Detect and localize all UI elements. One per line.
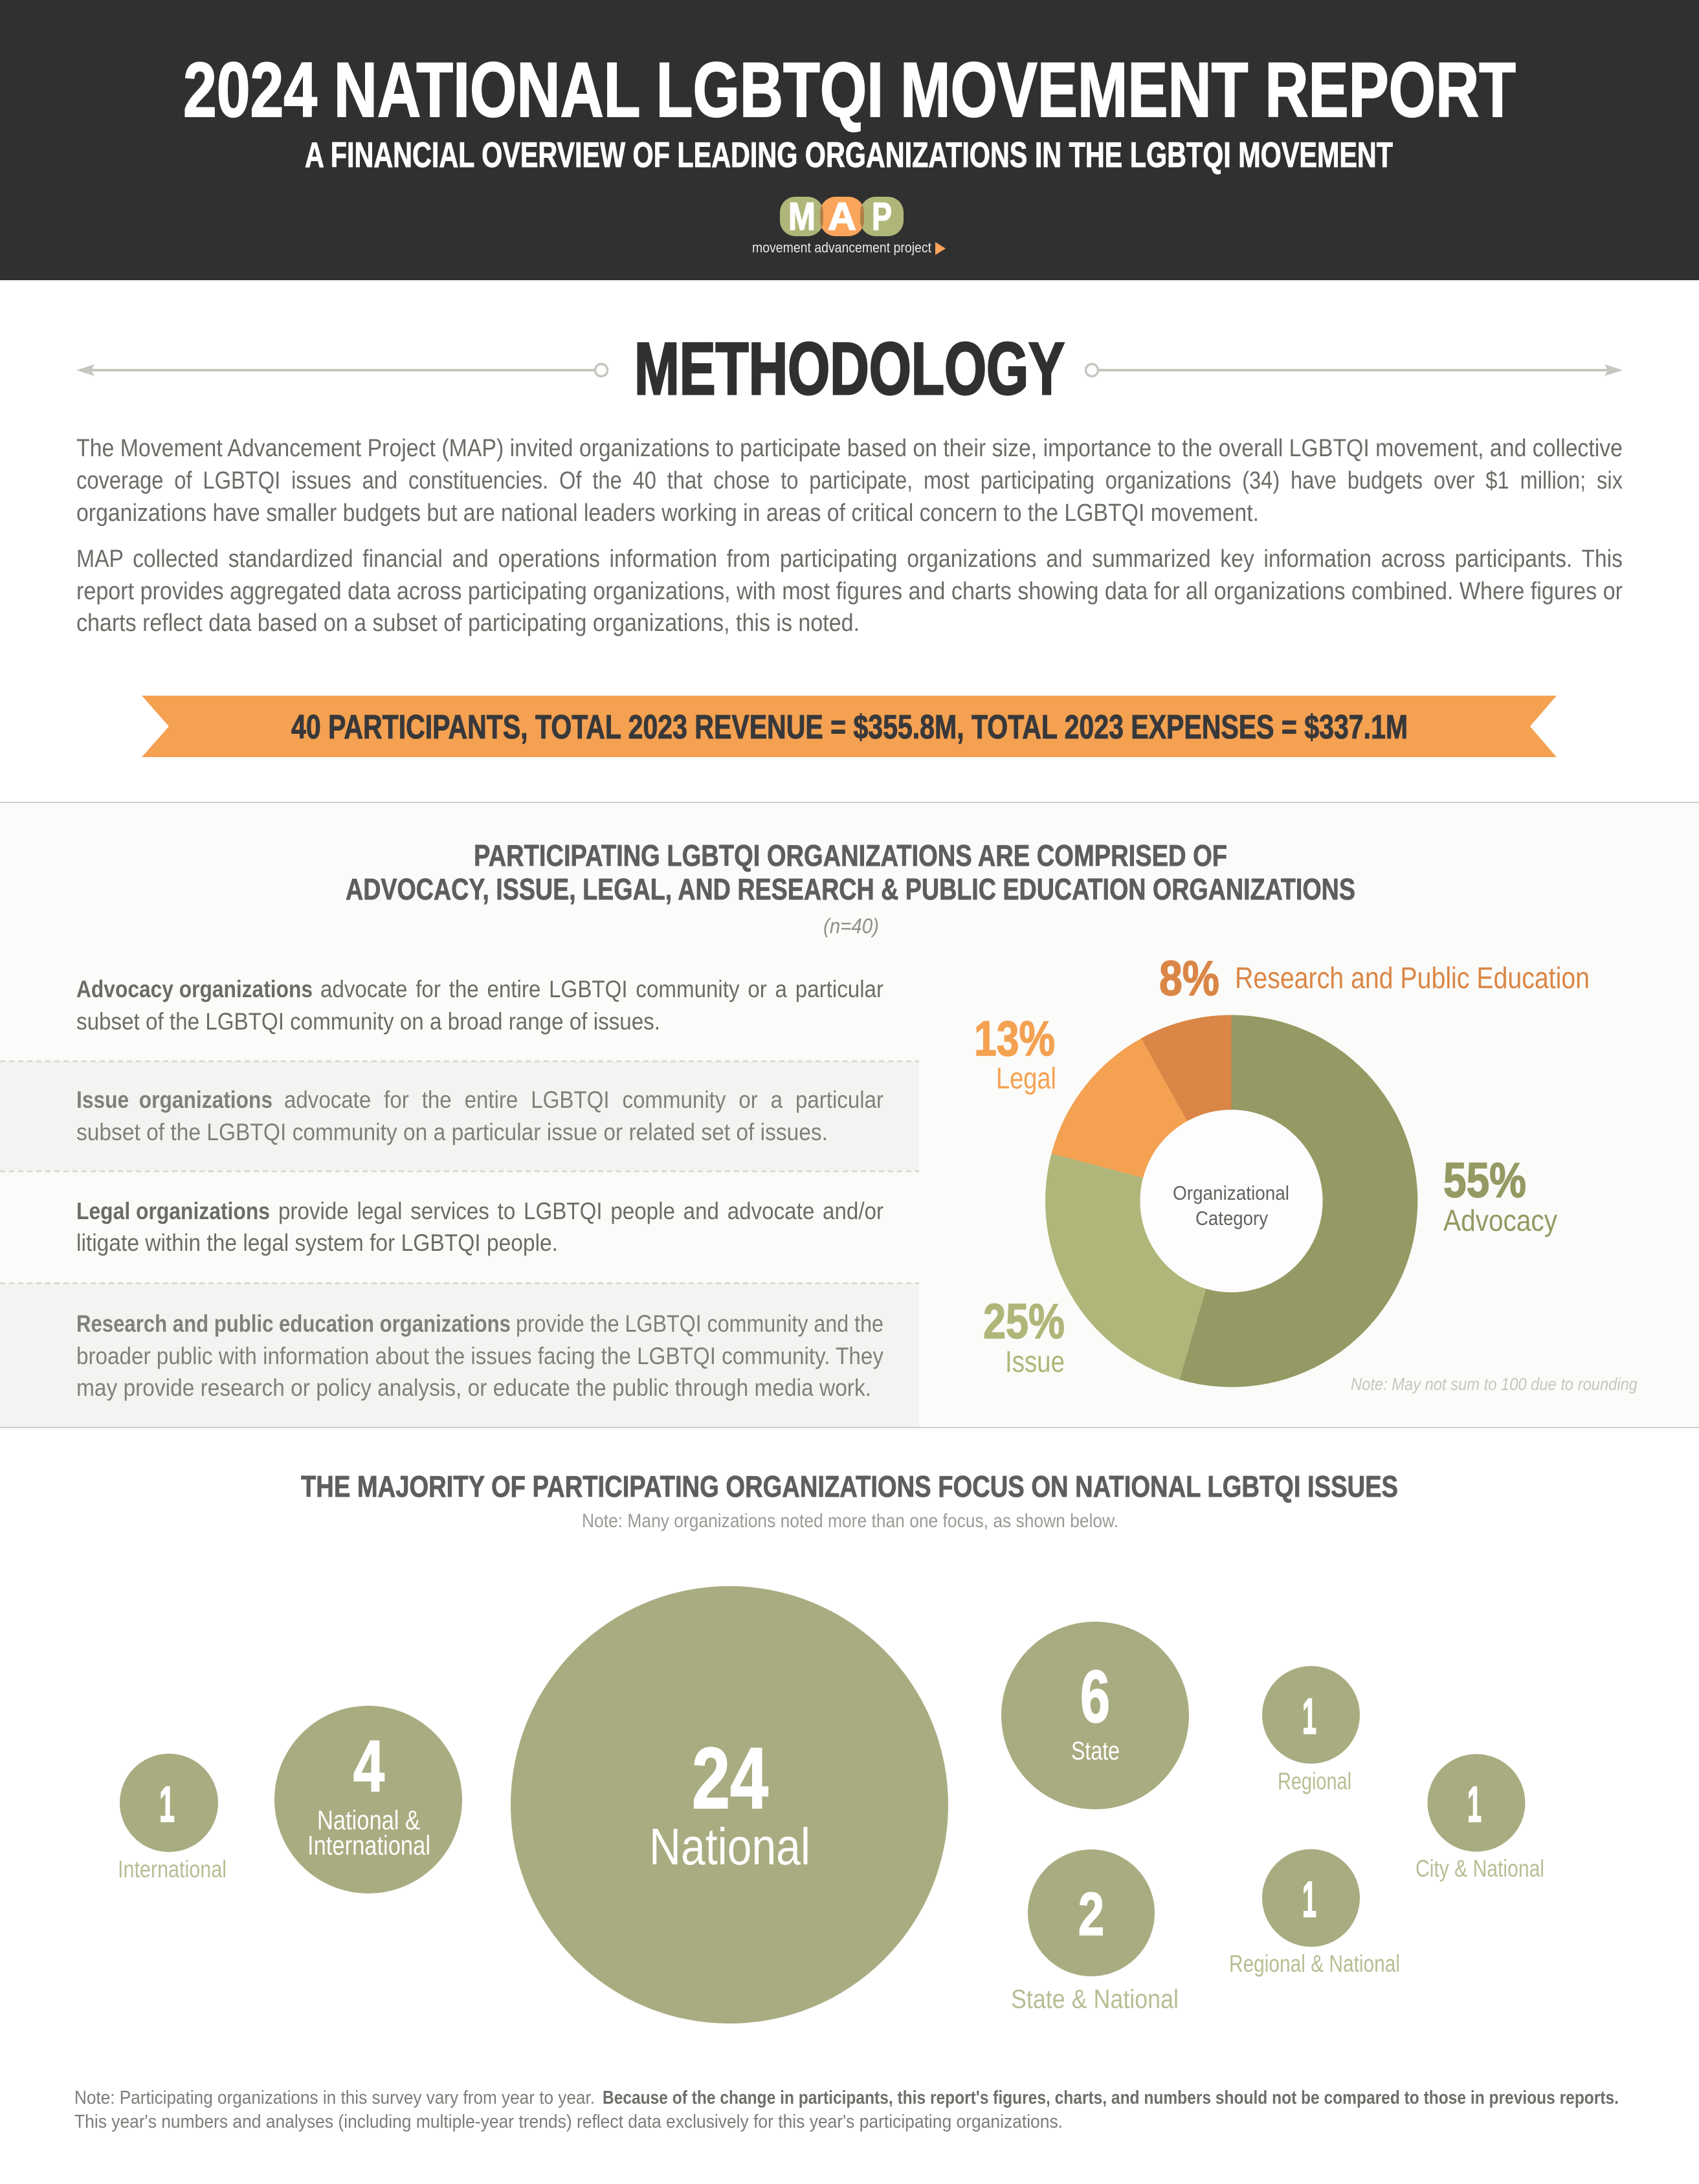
bubble: international 1: 1 [159, 1776, 175, 1833]
text block: paragraph two [76, 546, 1623, 637]
bubble: regional 1 [1262, 1666, 1360, 1794]
donut center label [1173, 1182, 1289, 1230]
bubble: state and national 2: 2 [1078, 1880, 1104, 1948]
text block: paragraph two: charts reflect data based on a subset of participating organizations, this is noted. [76, 610, 860, 637]
label: advocacy 55%: 55% [1443, 1153, 1526, 1208]
donut center label: Category [1195, 1207, 1268, 1230]
label: research 8% [1159, 951, 1590, 1006]
rounding note: Note: May not sum to 100 due to rounding [1351, 1374, 1638, 1394]
bubble: state 6 [1001, 1622, 1189, 1809]
banner: totals: 40 PARTICIPANTS, TOTAL 2023 REVENUE = $355.8M, TOTAL 2023 EXPENSES = $337.1M [291, 709, 1408, 746]
heading: focus: THE MAJORITY OF PARTICIPATING ORGANIZATIONS FOCUS ON NATIONAL LGBTQI ISSUES [301, 1470, 1398, 1503]
panel: methodology [76, 328, 1623, 757]
bubble: international 1 [118, 1754, 227, 1882]
heading: categories [346, 839, 1355, 906]
bubble: national 24: National [649, 1818, 810, 1875]
bubble: city and national 1 [1416, 1754, 1544, 1882]
bubble: state 6: State [1071, 1737, 1120, 1765]
text block: legal organizations [76, 1198, 883, 1256]
label: issue 25% [983, 1294, 1065, 1378]
sample size note: (n=40) [823, 914, 879, 938]
text block: research and public education organizations: may provide research or policy analysis, or educate the public through media work. [76, 1374, 871, 1401]
label: advocacy 55% [1443, 1153, 1557, 1237]
logo: MAP: M [788, 195, 816, 238]
bubble: city and national 1: 1 [1467, 1776, 1482, 1833]
text block: advocacy organizations: subset of the LGBTQI community on a broad range of issues. [76, 1008, 660, 1035]
footnote: This year's numbers and analyses (including multiple-year trends) reflect data exclusively for this year's participating organizations. [74, 2112, 1063, 2132]
label: issue 25%: Issue [1005, 1345, 1065, 1378]
bubble: state and national 2: State & National [1011, 1984, 1179, 2014]
text block: research and public education organizations: broader public with information about the issues facing the LGBTQI community. They [76, 1343, 883, 1369]
label: research 8%: Research and Public Education [1235, 961, 1590, 995]
logo: MAP [752, 195, 946, 256]
label: legal 13%: 13% [974, 1011, 1055, 1066]
text block: research and public education organizations: provide the LGBTQI community and the [516, 1310, 883, 1337]
label: research 8%: 8% [1159, 951, 1219, 1006]
bubble: state 6: 6 [1080, 1656, 1110, 1738]
focus note: Note: Many organizations noted more than one focus, as shown below. [582, 1510, 1118, 1532]
footnote [74, 2088, 1619, 2132]
text block: advocacy organizations: advocate for the entire LGBTQI community or a particular [320, 976, 883, 1002]
donut slice: research 8% [1141, 1015, 1231, 1121]
donut slice: issue 25% [1045, 1154, 1206, 1380]
logo: MAP: movement advancement project [752, 239, 931, 256]
text block: legal organizations: Legal organizations [76, 1198, 270, 1224]
bubble: national 24 [511, 1586, 948, 2024]
text block: research and public education organizations: Research and public education organizations [76, 1310, 511, 1337]
text block: paragraph one: organizations have smaller budgets but are national leaders working in areas of critical concern to the LGBTQI movement. [76, 500, 1259, 527]
label: advocacy 55%: Advocacy [1443, 1204, 1557, 1237]
footnote: Note: Participating organizations in this survey vary from year to year. [74, 2088, 595, 2108]
text block: issue organizations: Issue organizations [76, 1086, 272, 1113]
bubble: regional and national 1: 1 [1302, 1871, 1316, 1928]
bubble: national and international 4: International [307, 1830, 430, 1860]
bubble: national and international 4 [274, 1706, 462, 1893]
donut center [1140, 1110, 1323, 1292]
bubble: regional 1: 1 [1302, 1688, 1316, 1745]
donut center label: Organizational [1173, 1182, 1289, 1204]
panel: header [0, 0, 1699, 280]
text block: legal organizations: provide legal services to LGBTQI people and advocate and/or [278, 1198, 883, 1224]
heading: categories: ADVOCACY, ISSUE, LEGAL, AND RESEARCH & PUBLIC EDUCATION ORGANIZATIONS [346, 872, 1355, 906]
donut slice: legal 13% [1051, 1039, 1187, 1178]
banner: totals [142, 696, 1557, 757]
bubble: national and international 4: National & [317, 1805, 420, 1835]
donut chart: organizational category [1045, 1015, 1417, 1387]
bubble: national and international 4: 4 [353, 1726, 384, 1807]
label: legal 13% [974, 1011, 1056, 1095]
bubble: state and national 2 [1011, 1849, 1179, 2014]
bubble: international 1: International [118, 1856, 227, 1882]
bubble: regional and national 1 [1229, 1849, 1400, 1977]
text block: issue organizations [76, 1086, 883, 1145]
donut slice: advocacy 55% [1179, 1015, 1417, 1387]
text block: legal organizations: litigate within the legal system for LGBTQI people. [76, 1230, 558, 1256]
bubble: regional 1: Regional [1278, 1768, 1351, 1794]
logo: MAP: P [872, 195, 892, 238]
logo: MAP: A [828, 195, 856, 238]
heading: categories: PARTICIPATING LGBTQI ORGANIZATIONS ARE COMPRISED OF [474, 839, 1227, 872]
bubble: city and national 1: City & National [1416, 1855, 1544, 1882]
text block: issue organizations: subset of the LGBTQI community on a particular issue or related set of issues. [76, 1119, 828, 1145]
bubble: national 24: 24 [692, 1730, 768, 1827]
panel: geographic focus [118, 1470, 1544, 2024]
text block: paragraph one [76, 435, 1623, 527]
label: legal 13%: Legal [996, 1061, 1056, 1095]
text block: advocacy organizations: Advocacy organizations [76, 976, 313, 1002]
panel: organization categories [0, 802, 1699, 1428]
label: issue 25%: 25% [983, 1294, 1065, 1349]
heading: methodology: METHODOLOGY [634, 328, 1065, 410]
text block: advocacy organizations [76, 976, 883, 1035]
arrow: left [76, 364, 607, 377]
text block: issue organizations: advocate for the entire LGBTQI community or a particular [284, 1086, 883, 1113]
bubble: regional and national 1: Regional & National [1229, 1950, 1400, 1977]
arrow: right [1086, 364, 1623, 377]
text block: research and public education organizations [76, 1310, 883, 1401]
